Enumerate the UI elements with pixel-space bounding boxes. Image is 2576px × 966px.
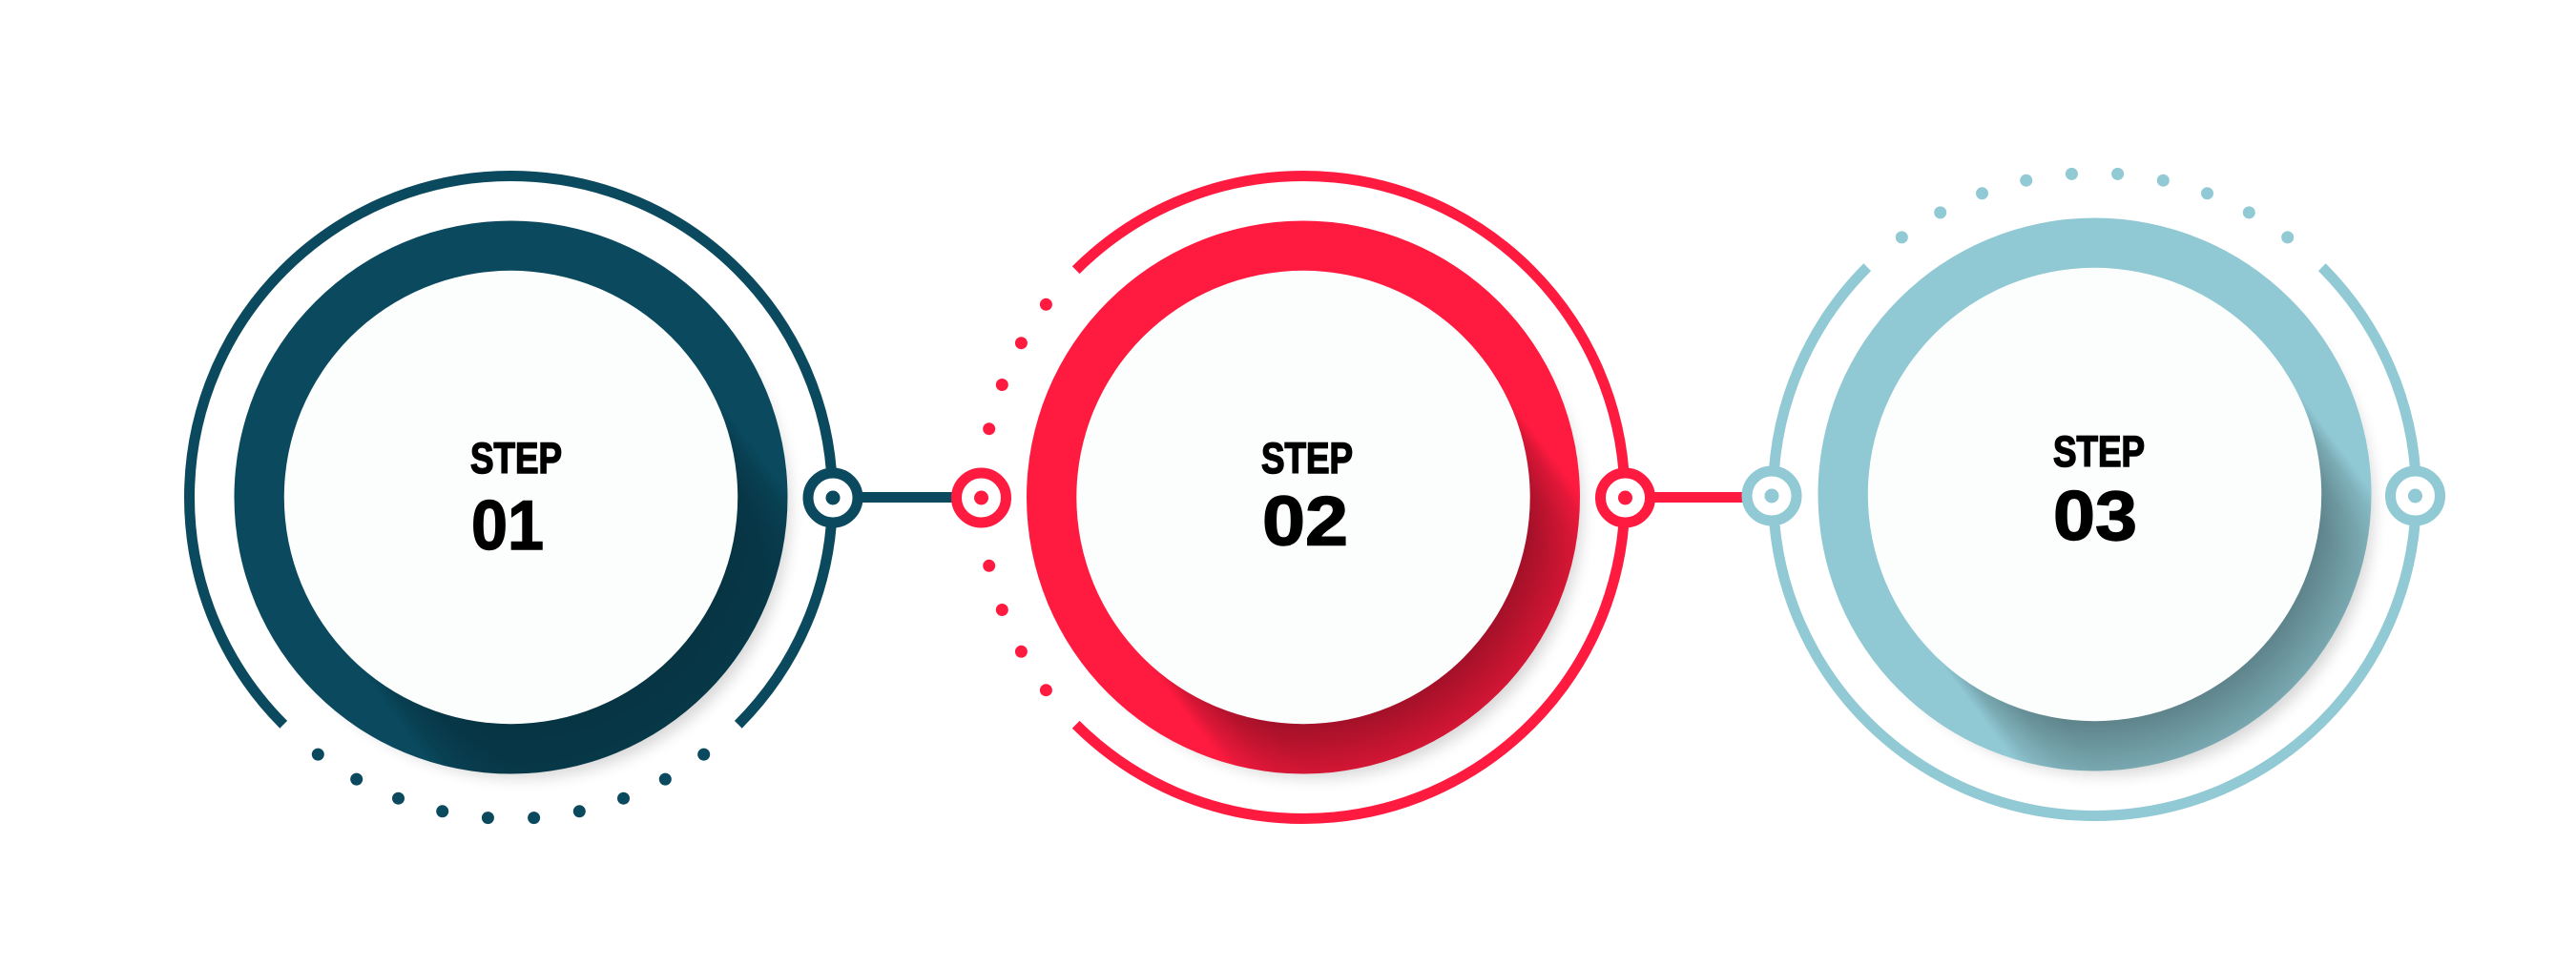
dotted arc (1896, 168, 2294, 243)
outer arc ring (189, 176, 833, 725)
thick ring (1818, 217, 2372, 771)
connector: step 1 to step 2 (859, 492, 983, 503)
step 3 label: STEP (2053, 427, 2145, 476)
connector: step 2 to step 3 (1651, 492, 1746, 503)
drop shadow (1839, 240, 2374, 774)
drop shadow (256, 244, 790, 778)
node: right connector (808, 473, 858, 523)
dotted arc (983, 298, 1052, 696)
node: right connector (2391, 471, 2441, 521)
cast shadow on ring (1155, 404, 1580, 774)
cast shadow on ring (1949, 404, 2371, 771)
cast shadow on ring (380, 423, 787, 774)
drop shadow (1048, 244, 1582, 778)
step 1 panel (184, 171, 862, 824)
step 3 number: 03 (2053, 478, 2137, 555)
step 1 label: STEP (470, 434, 562, 483)
step 2 number: 02 (1262, 483, 1348, 561)
thick ring (1027, 221, 1580, 774)
thick ring (235, 221, 788, 774)
step 2 panel (951, 171, 1655, 824)
outer arc ring (1076, 175, 1625, 818)
outer arc ring (1773, 267, 2416, 815)
step 3 panel (1742, 168, 2445, 821)
step 2 label: STEP (1261, 434, 1353, 483)
node: right connector (1601, 473, 1651, 523)
infographic: three connected steps (184, 168, 2445, 824)
dotted arc (312, 749, 710, 824)
node: left connector (956, 473, 1006, 523)
white centre disc (1076, 271, 1530, 724)
white centre disc (1868, 268, 2321, 721)
step 1 number: 01 (471, 487, 544, 565)
node: left connector (1747, 471, 1797, 521)
white centre disc (284, 271, 737, 724)
